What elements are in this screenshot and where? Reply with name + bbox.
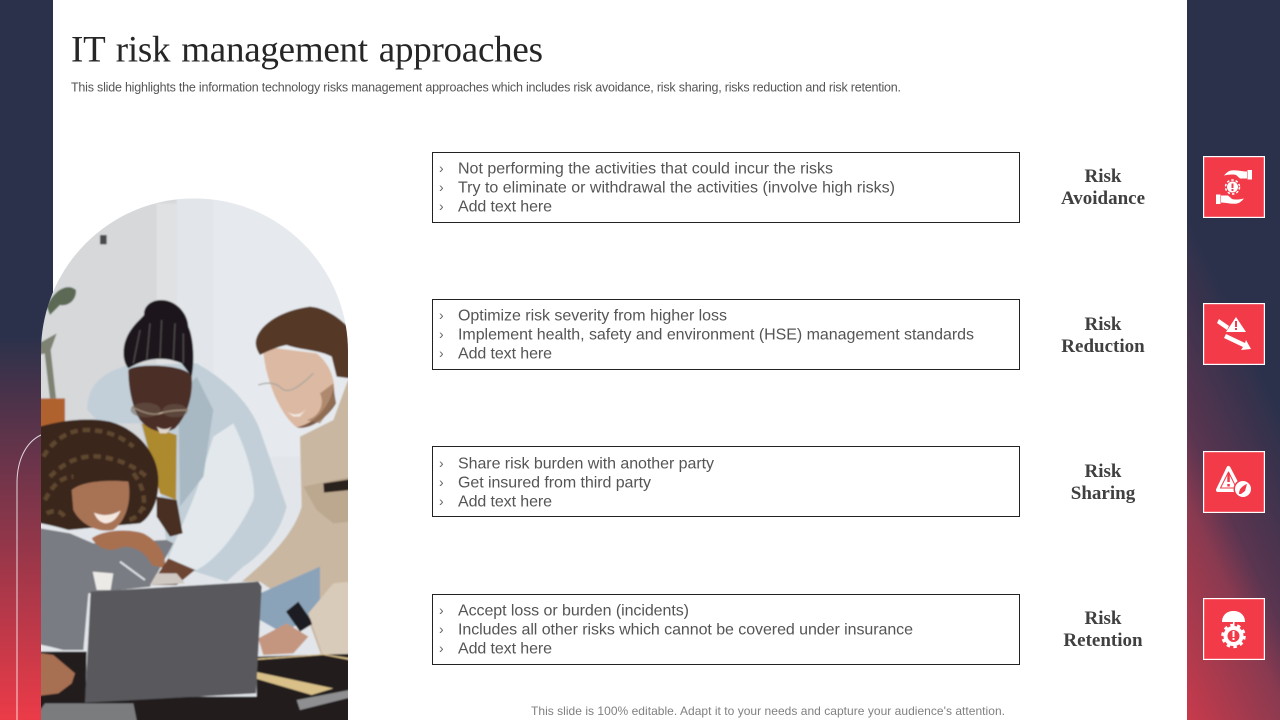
text box 1: › xyxy=(439,160,444,176)
table and tablet xyxy=(20,652,367,720)
label 2: Risk xyxy=(1085,314,1122,335)
label 2: Reduction xyxy=(1061,336,1145,357)
centre man's head xyxy=(128,366,192,432)
footer note: This slide is 100% editable. Adapt it to your needs and capture your audience's attention. xyxy=(531,704,1005,718)
row 3: risk sharing xyxy=(432,446,1264,516)
text box 4: Includes all other risks which cannot be covered under insurance xyxy=(458,622,913,638)
text box 2: Add text here xyxy=(458,346,552,362)
label 4: Retention xyxy=(1063,630,1143,651)
row 2: risk reduction xyxy=(432,300,1264,370)
photo: team around a laptop xyxy=(41,198,348,720)
text box 1: › xyxy=(439,198,444,214)
icon 4: umbrella over gear xyxy=(1204,599,1264,659)
laptop xyxy=(85,582,262,703)
text box 4: Add text here xyxy=(458,640,552,658)
text box 3: Get insured from third party xyxy=(458,474,651,492)
text box 1: Add text here xyxy=(458,198,552,216)
panel: left gradient band xyxy=(0,0,53,720)
label 3: Risk xyxy=(1085,461,1122,482)
woman's lower hand xyxy=(41,652,76,697)
icon 3: warning triangle and gauge xyxy=(1204,452,1264,512)
text box 4: › xyxy=(439,621,444,637)
woman's blazer xyxy=(41,528,174,651)
woman's face xyxy=(72,481,129,531)
label 4: Risk xyxy=(1085,608,1122,629)
text box 1: Not performing the activities that could incur the risks xyxy=(458,160,833,178)
text box 3: Share risk burden with another party xyxy=(458,456,714,472)
text box 3: › xyxy=(439,455,444,471)
plant xyxy=(47,287,76,315)
text box 3: › xyxy=(439,474,444,490)
text box 2 xyxy=(432,300,1020,370)
right man's head xyxy=(263,347,334,428)
text box 3: Add text here xyxy=(458,494,552,510)
text box 4: › xyxy=(439,602,444,618)
label 1: Avoidance xyxy=(1061,188,1145,209)
text box 2: Implement health, safety and environment (HSE) management standards xyxy=(458,326,974,344)
woman's hand xyxy=(92,531,165,568)
text box 4: Accept loss or burden (incidents) xyxy=(458,602,689,620)
text box 1: › xyxy=(439,179,444,195)
text box 4 xyxy=(432,594,1020,664)
text box 2: › xyxy=(439,326,444,342)
right man's jacket xyxy=(242,380,348,655)
subtitle text: This slide highlights the information technology risks management approaches which includes risk avoidance, risk sharing, risks reduction and risk retention. xyxy=(71,80,901,94)
woman's hair xyxy=(41,418,160,531)
title: IT risk management approaches xyxy=(71,30,543,70)
row 1: risk avoidance xyxy=(432,152,1264,222)
text box 2: › xyxy=(439,345,444,361)
text box 2: Optimize risk severity from higher loss xyxy=(458,308,727,324)
text box 4: › xyxy=(439,640,444,656)
text box 3 xyxy=(432,446,1020,516)
centre man's jacket xyxy=(87,363,287,582)
text box 2: › xyxy=(439,307,444,323)
label 3: Sharing xyxy=(1071,483,1136,504)
decorative arc outline behind photo xyxy=(17,435,41,720)
text box 3: › xyxy=(439,493,444,509)
text box 1 xyxy=(432,152,1020,222)
jeans, watch and hand xyxy=(260,567,320,633)
icon 1: hands and gear xyxy=(1204,157,1264,217)
label 1: Risk xyxy=(1085,166,1122,187)
row 4: risk retention xyxy=(432,594,1264,664)
text box 1: Try to eliminate or withdrawal the activities (involve high risks) xyxy=(458,180,895,196)
panel: right gradient band xyxy=(1187,0,1280,720)
icon 2: warning and falling arrow xyxy=(1204,304,1264,364)
